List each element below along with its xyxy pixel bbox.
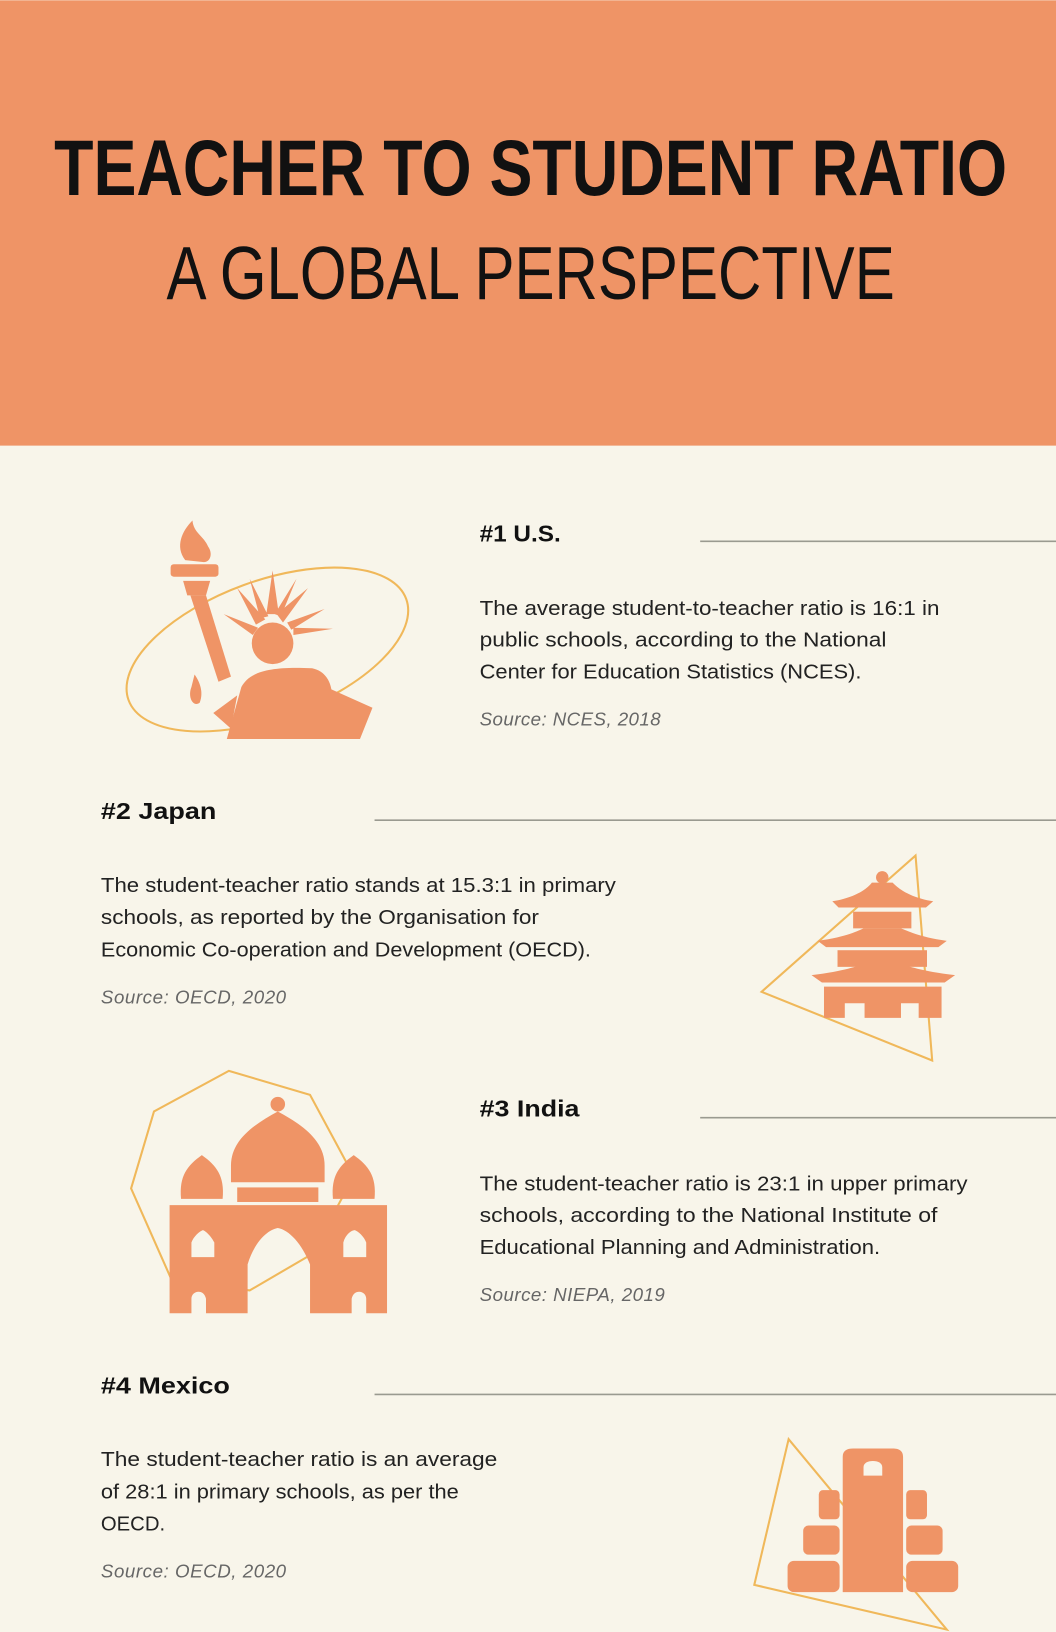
section 1: U.S. bbox=[480, 520, 1056, 729]
icon: mayan pyramid bbox=[754, 1439, 958, 1630]
text block: Mexico: OECD. bbox=[101, 1514, 165, 1536]
source: Japan: Source: OECD, 2020 bbox=[101, 986, 287, 1007]
text block: U.S.: public schools, according to the National bbox=[480, 629, 886, 651]
text block: India bbox=[480, 1174, 969, 1259]
section 4: Mexico bbox=[101, 1372, 1056, 1582]
source: U.S.: Source: NCES, 2018 bbox=[480, 708, 661, 729]
text block: Mexico bbox=[101, 1449, 497, 1536]
section 2: Japan bbox=[101, 798, 1056, 1007]
subtitle: A GLOBAL PERSPECTIVE bbox=[166, 231, 895, 315]
text block: U.S. bbox=[480, 598, 939, 684]
text block: Japan bbox=[101, 875, 617, 961]
heading: #3 India: #3 India bbox=[480, 1096, 580, 1122]
source: India: Source: NIEPA, 2019 bbox=[480, 1284, 665, 1305]
heading: #2 Japan: #2 Japan bbox=[101, 798, 216, 824]
text block: Japan: The student-teacher ratio stands at 15.3:1 in primary bbox=[101, 875, 617, 897]
text block: U.S.: Center for Education Statistics (NCES). bbox=[480, 662, 861, 684]
text block: Japan: schools, as reported by the Organisation for bbox=[101, 907, 539, 929]
text block: U.S.: The average student-to-teacher ratio is 16:1 in bbox=[480, 598, 939, 620]
header band bbox=[0, 0, 1056, 446]
text block: India: schools, according to the National Institute of bbox=[480, 1205, 938, 1227]
icon: statue of liberty bbox=[105, 521, 430, 765]
text block: Mexico: of 28:1 in primary schools, as per the bbox=[101, 1481, 459, 1503]
source: Mexico: Source: OECD, 2020 bbox=[101, 1561, 287, 1582]
text block: India: The student-teacher ratio is 23:1 in upper primary bbox=[480, 1174, 969, 1196]
section 3: India bbox=[480, 1096, 1056, 1305]
text block: India: Educational Planning and Administration. bbox=[480, 1237, 880, 1259]
text block: Japan: Economic Co-operation and Development (OECD). bbox=[101, 939, 591, 961]
heading: #4 Mexico: #4 Mexico bbox=[101, 1372, 230, 1398]
icon: pagoda bbox=[762, 856, 955, 1060]
icon: taj mahal bbox=[131, 1071, 387, 1313]
heading: #1 U.S.: #1 U.S. bbox=[480, 520, 561, 546]
text block: Mexico: The student-teacher ratio is an average bbox=[101, 1449, 497, 1471]
